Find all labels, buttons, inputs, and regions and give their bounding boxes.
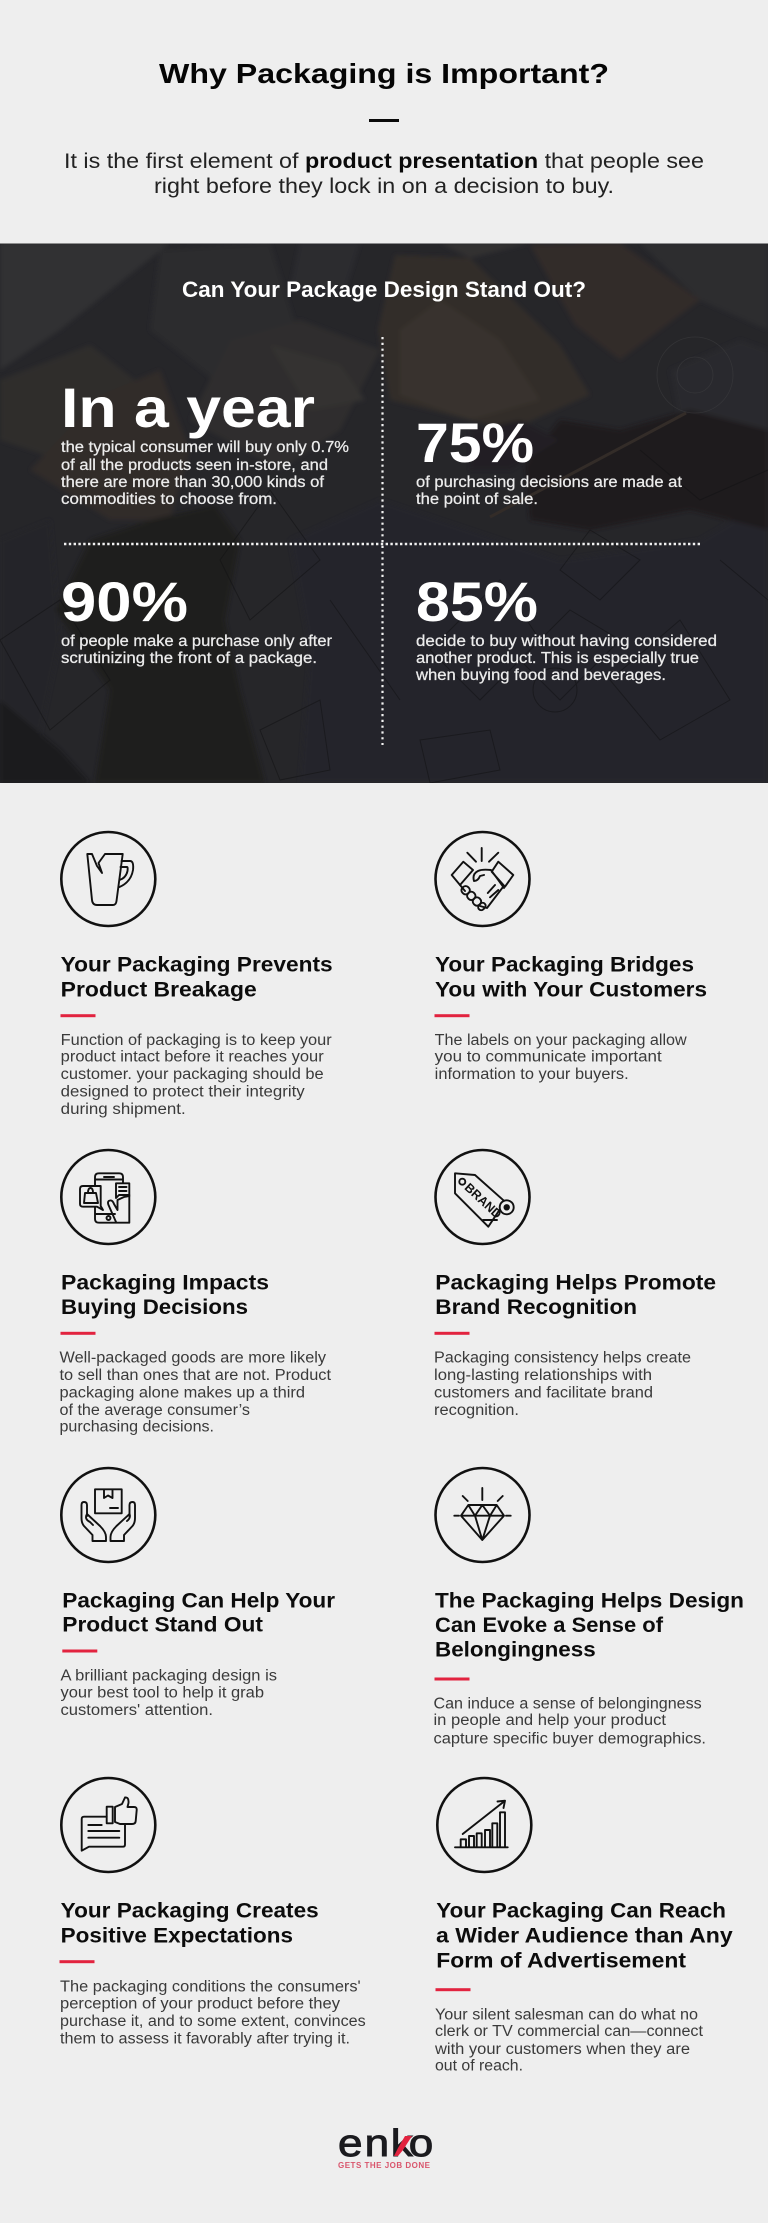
body text: them to assess it favorably after trying it.: [60, 2030, 350, 2047]
stat: 75%: the point of sale.: [416, 491, 538, 508]
red accent: [434, 1332, 470, 1335]
icon: phone shopping: [61, 1150, 155, 1244]
body text: [60, 1350, 332, 1436]
heading: Product Stand Out: [62, 1613, 263, 1637]
stat: in a year: In a year: [61, 376, 315, 439]
red accent: [62, 1650, 97, 1652]
heading: Brand Recognition: [435, 1295, 637, 1319]
heading: Product Breakage: [61, 978, 257, 1002]
heading: Positive Expectations: [61, 1924, 293, 1948]
stat: 90%: 90%: [61, 570, 188, 633]
stat: in a year: [61, 376, 349, 508]
body text: perception of your product before they: [60, 1995, 340, 2012]
heading: Your Packaging Prevents: [61, 953, 333, 977]
body text: designed to protect their integrity: [61, 1084, 305, 1101]
body text: recognition.: [434, 1402, 519, 1419]
heading: Packaging Can Help Your: [62, 1588, 336, 1612]
title: Why Packaging is Important?: [159, 58, 609, 89]
heading: Buying Decisions: [61, 1295, 248, 1319]
heading: Belongingness: [435, 1638, 596, 1662]
body text: packaging alone makes up a third: [60, 1385, 305, 1402]
body text: [60, 1668, 277, 1719]
body text: product intact before it reaches your: [61, 1049, 324, 1066]
stat: in a year: there are more than 30,000 kinds of: [61, 474, 325, 491]
heading: [436, 1898, 733, 1972]
icon: rising bar chart: [437, 1778, 531, 1872]
body text: during shipment.: [61, 1101, 186, 1118]
red accent: [434, 1678, 470, 1680]
body text: customers' attention.: [60, 1702, 213, 1719]
body text: capture specific buyer demographics.: [434, 1730, 706, 1747]
heading: Form of Advertisement: [436, 1948, 686, 1972]
body text: to sell than ones that are not. Product: [60, 1367, 332, 1384]
body text: of the average consumer’s: [60, 1402, 250, 1419]
panel: dark photo statistics band: [0, 243, 768, 783]
body text: A brilliant packaging design is: [60, 1668, 277, 1685]
logo: enko: GETS THE JOB DONE: [338, 2161, 431, 2170]
body text: purchasing decisions.: [60, 1419, 214, 1436]
intro text: right before they lock in on a decision to buy.: [154, 175, 614, 198]
body text: purchase it, and to some extent, convinces: [60, 2013, 366, 2030]
body text: out of reach.: [435, 2058, 523, 2075]
body text: [60, 1979, 366, 2047]
heading: [435, 1270, 716, 1319]
panel: positive expectations: [60, 1778, 366, 2047]
photo background: [0, 243, 768, 783]
heading: Your Packaging Can Reach: [436, 1898, 726, 1922]
intro text: It is the first element of product presentation that people see: [64, 150, 704, 173]
body text: with your customers when they are: [434, 2041, 690, 2058]
heading: [61, 953, 333, 1002]
heading: You with Your Customers: [435, 978, 707, 1002]
red accent: [60, 1332, 96, 1335]
body text: [434, 1695, 706, 1747]
horizontal dotted divider: [64, 543, 701, 545]
body text: The labels on your packaging allow: [435, 1032, 688, 1049]
heading: [61, 1898, 319, 1948]
stat: in a year: of all the products seen in-store, and: [61, 457, 328, 474]
stat: 85%: [415, 570, 717, 684]
icon: brand tag: [436, 1150, 530, 1244]
section heading: Can Your Package Design Stand Out?: [182, 277, 586, 302]
stat: 75%: [416, 411, 683, 508]
stat: 90%: scrutinizing the front of a package.: [61, 650, 317, 667]
panel: stand out: [60, 1468, 336, 1719]
stat: 75%: 75%: [416, 411, 534, 474]
body text: [61, 1032, 332, 1118]
body text: Well-packaged goods are more likely: [60, 1350, 326, 1367]
stat: in a year: commodities to choose from.: [61, 491, 277, 508]
body text: [435, 1032, 688, 1083]
body text: customers and facilitate brand: [434, 1385, 653, 1402]
stat: 75%: of purchasing decisions are made at: [416, 474, 683, 491]
body text: Can induce a sense of belongingness: [434, 1695, 702, 1712]
body text: in people and help your product: [434, 1712, 667, 1729]
body text: Your silent salesman can do what no: [435, 2006, 698, 2023]
heading: [435, 1588, 744, 1662]
body text: clerk or TV commercial can—connect: [435, 2023, 704, 2040]
body text: Function of packaging is to keep your: [61, 1032, 332, 1049]
body text: customer. your packaging should be: [61, 1066, 324, 1083]
body text: long-lasting relationships with: [434, 1367, 652, 1384]
body text: [434, 2006, 704, 2075]
stat: 90%: [61, 570, 332, 667]
body text: The packaging conditions the consumers': [60, 1979, 361, 1996]
stat: 85%: decide to buy without having considered: [416, 633, 717, 650]
heading: a Wider Audience than Any: [436, 1924, 733, 1948]
body text: your best tool to help it grab: [60, 1685, 264, 1702]
icon: hands holding box: [61, 1468, 155, 1562]
heading: [435, 953, 707, 1002]
intro text: [64, 150, 704, 198]
panel: belongingness: [434, 1468, 744, 1747]
title dash: [369, 119, 399, 122]
panel: prevents breakage: [60, 832, 333, 1118]
icon: brand tag: BRAND: [462, 1180, 504, 1222]
logo: enko: enko: [338, 2122, 433, 2164]
heading: Packaging Impacts: [61, 1270, 269, 1294]
panel: wider audience: [434, 1778, 733, 2075]
heading: Your Packaging Bridges: [435, 953, 694, 977]
heading: Can Evoke a Sense of: [435, 1613, 664, 1637]
icon: diamond: [436, 1468, 530, 1562]
red accent: [60, 1960, 94, 1963]
vertical dotted divider: [381, 337, 384, 745]
body text: information to your buyers.: [435, 1066, 629, 1083]
red accent: [60, 1014, 96, 1017]
heading: [62, 1588, 336, 1637]
heading: The Packaging Helps Design: [435, 1588, 744, 1612]
stat: 85%: 85%: [416, 570, 538, 633]
heading: Packaging Helps Promote: [435, 1270, 716, 1294]
body text: you to communicate important: [435, 1049, 662, 1066]
heading: [61, 1270, 269, 1319]
panel: buying decisions: [60, 1150, 332, 1436]
red accent: [434, 1014, 470, 1017]
icon: handshake: [436, 832, 530, 926]
body text: Packaging consistency helps create: [434, 1350, 691, 1367]
icon: broken mug: [61, 832, 155, 926]
body text: [434, 1350, 691, 1419]
stat: 90%: of people make a purchase only after: [61, 633, 332, 650]
stat: 85%: another product. This is especially true: [416, 650, 699, 667]
panel: brand recognition: [434, 1150, 716, 1419]
panel: bridges customers: [434, 832, 707, 1083]
red accent: [436, 1988, 470, 1991]
stat: in a year: the typical consumer will buy only 0.7%: [61, 439, 349, 456]
stat: 85%: when buying food and beverages.: [415, 667, 666, 684]
heading: Your Packaging Creates: [61, 1898, 319, 1922]
icon: comment and thumbs up: [61, 1778, 155, 1872]
